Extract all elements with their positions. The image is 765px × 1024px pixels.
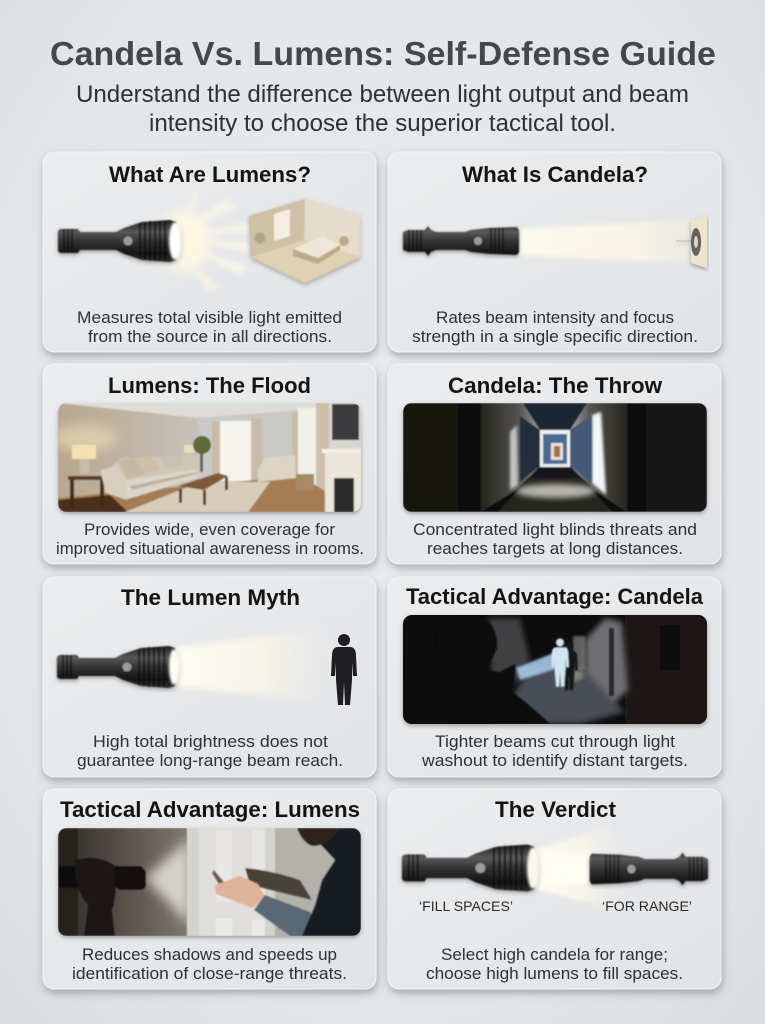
fireplace [325, 450, 361, 512]
description: choose high lumens to fill spaces. [426, 964, 683, 983]
flashlight in fist [58, 866, 143, 888]
panel: candela throw [388, 364, 721, 564]
lamp [72, 445, 96, 459]
plant [193, 436, 211, 454]
description [421, 732, 688, 770]
description: Provides wide, even coverage for [84, 520, 335, 539]
description: Concentrated light blinds threats and [413, 520, 697, 539]
icon: wide fading beam [172, 628, 335, 702]
panel: what is candela [388, 152, 721, 352]
panel: what are lumens [43, 152, 376, 352]
lamp 2 [184, 445, 194, 453]
person [254, 894, 312, 936]
description: Select high candela for range; [441, 945, 668, 964]
cast shadow [245, 868, 312, 900]
description [72, 945, 347, 983]
heading: What Are Lumens? [109, 162, 311, 187]
description: Tighter beams cut through light [435, 732, 675, 751]
title: Candela Vs. Lumens: Self-Defense Guide [50, 35, 716, 72]
icon: throw flashlight [590, 852, 708, 886]
panel: lumen myth [43, 577, 376, 777]
beam [516, 652, 559, 680]
icon: light rays [158, 192, 252, 292]
description: identification of close-range threats. [72, 964, 347, 983]
label: fill spaces: ‘FILL SPACES’ [419, 898, 513, 914]
icon: flashlight [57, 646, 179, 688]
heading: Tactical Advantage: Candela [406, 584, 704, 609]
armchair [258, 455, 296, 482]
subtitle: Understand the difference between light output and beam [76, 81, 689, 108]
sofa [112, 456, 196, 480]
subtitle [76, 81, 689, 137]
description [413, 520, 697, 558]
description [77, 732, 343, 770]
description: strength in a single specific direction. [412, 327, 698, 346]
description [426, 945, 683, 983]
hand with phone [212, 870, 224, 884]
foreground silhouette [403, 615, 550, 724]
description: Reduces shadows and speeds up [82, 945, 337, 964]
icon: target [676, 215, 707, 268]
heading: What Is Candela? [462, 162, 648, 187]
photo: door and hand [58, 828, 361, 936]
description: Rates beam intensity and focus [436, 308, 674, 327]
photo: corridor [403, 403, 707, 512]
description: guarantee long-range beam reach. [77, 751, 343, 770]
icon: narrow beam [518, 220, 692, 263]
description [412, 308, 698, 346]
panel: lumens flood [43, 364, 376, 564]
heading: Candela: The Throw [448, 373, 663, 398]
icon: person silhouette [331, 634, 357, 705]
description: from the source in all directions. [88, 327, 332, 346]
panel: tactical advantage lumens [43, 789, 376, 989]
heading: Tactical Advantage: Lumens [60, 797, 360, 822]
figures [551, 638, 578, 690]
coffee table [178, 473, 228, 490]
description: Measures total visible light emitted [77, 308, 342, 327]
heading: The Verdict [495, 797, 617, 822]
icon: room cutaway [249, 199, 360, 283]
heading: Lumens: The Flood [108, 373, 311, 398]
description: improved situational awareness in rooms. [56, 539, 364, 558]
icon: flashlight [58, 220, 181, 262]
description: washout to identify distant targets. [421, 751, 688, 770]
description: High total brightness does not [93, 732, 328, 751]
panel: tactical advantage candela [388, 577, 721, 777]
photo: alley [403, 615, 707, 724]
icon: flashlight [403, 226, 519, 256]
description [77, 308, 342, 346]
label: for range: ‘FOR RANGE’ [602, 898, 692, 914]
heading: The Lumen Myth [121, 585, 300, 610]
panel: verdict [388, 789, 721, 989]
icon: crossing beams [532, 826, 625, 912]
subtitle: intensity to choose the superior tactical tool. [149, 110, 616, 137]
photo: living room [53, 403, 361, 512]
description [56, 520, 364, 558]
description: reaches targets at long distances. [427, 539, 683, 558]
icon: flood flashlight [402, 844, 539, 892]
